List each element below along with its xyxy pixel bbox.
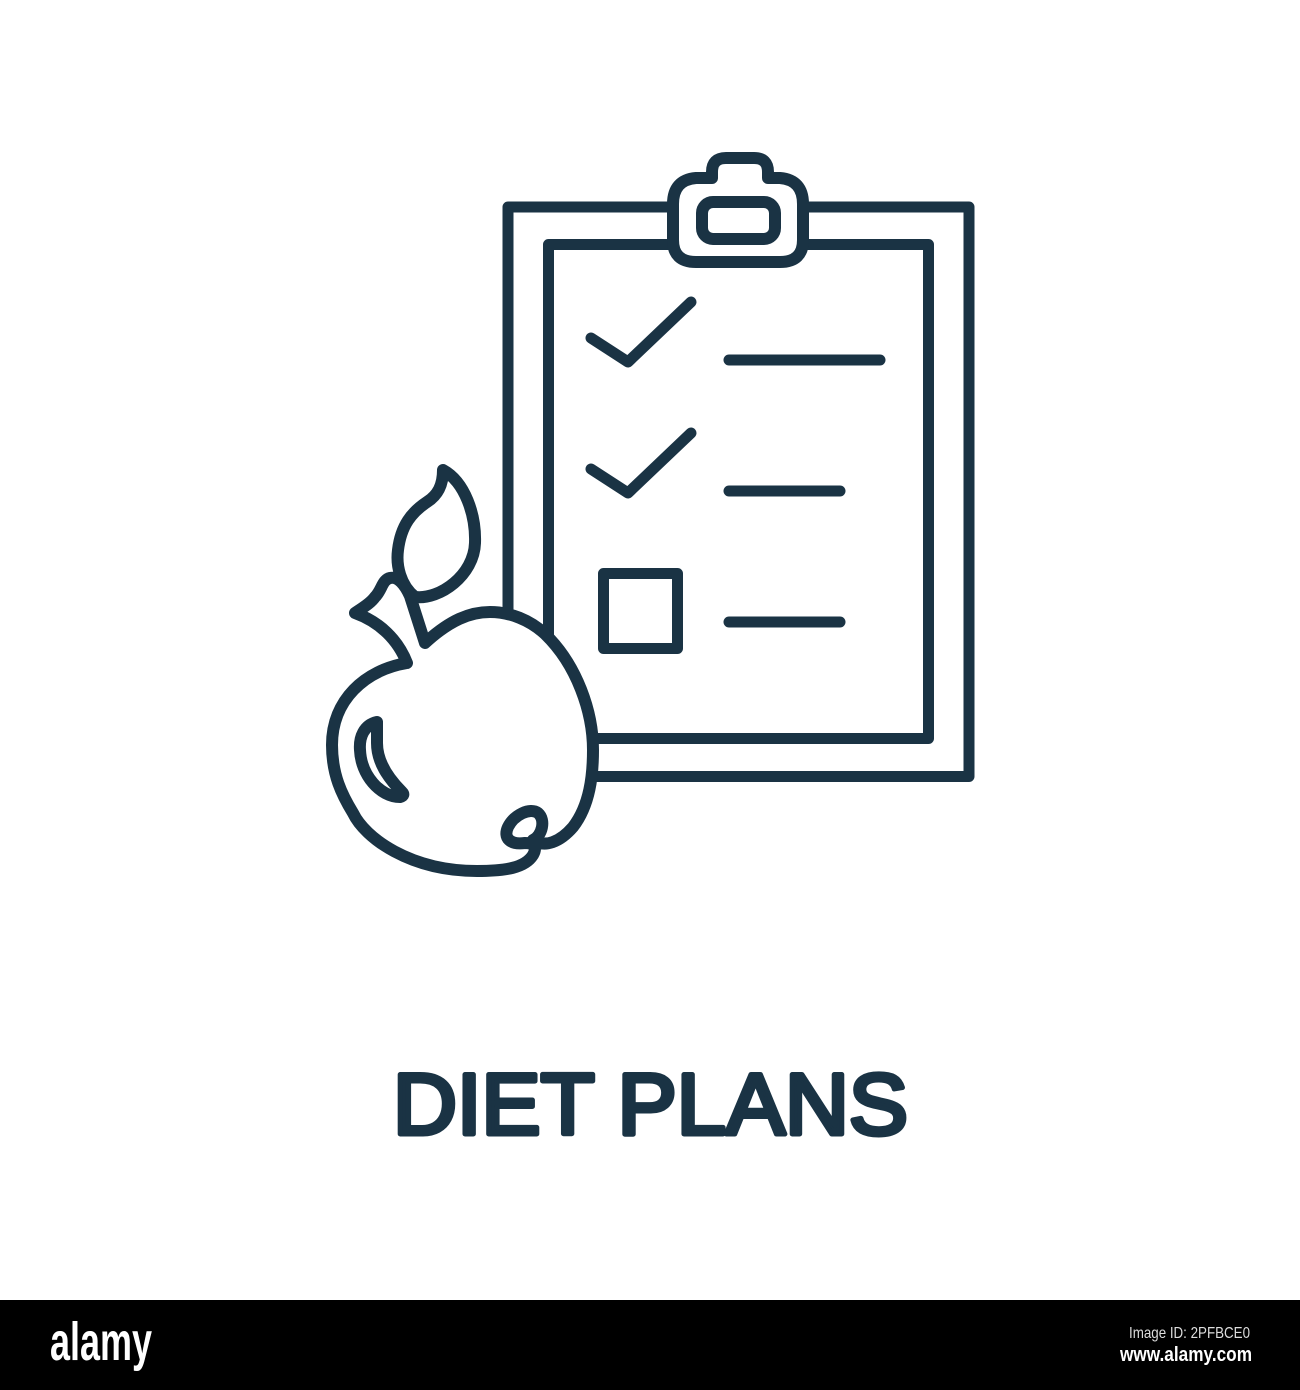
alamy logo: alamy <box>50 1312 152 1372</box>
list line 3 <box>729 616 840 628</box>
footer bar <box>0 1300 1300 1390</box>
clipboard outer board <box>508 207 969 776</box>
image id: Image ID: 2PFBCE0 <box>1129 1325 1250 1342</box>
apple highlight <box>360 722 403 797</box>
list line 2 <box>729 486 840 496</box>
clipboard inner sheet <box>548 244 928 738</box>
apple body <box>332 578 593 871</box>
clip slot <box>702 202 775 239</box>
clipboard clip <box>673 158 803 262</box>
apple leaf <box>398 470 475 597</box>
check mark 2 <box>591 433 691 493</box>
list line 1 <box>729 354 880 366</box>
empty checkbox <box>604 574 678 648</box>
icon: apple <box>332 470 593 871</box>
website: www.alamy.com <box>1119 1344 1252 1366</box>
check mark 1 <box>591 302 691 362</box>
title: DIET PLANS <box>393 1057 908 1153</box>
icon: clipboard checklist <box>508 158 969 776</box>
